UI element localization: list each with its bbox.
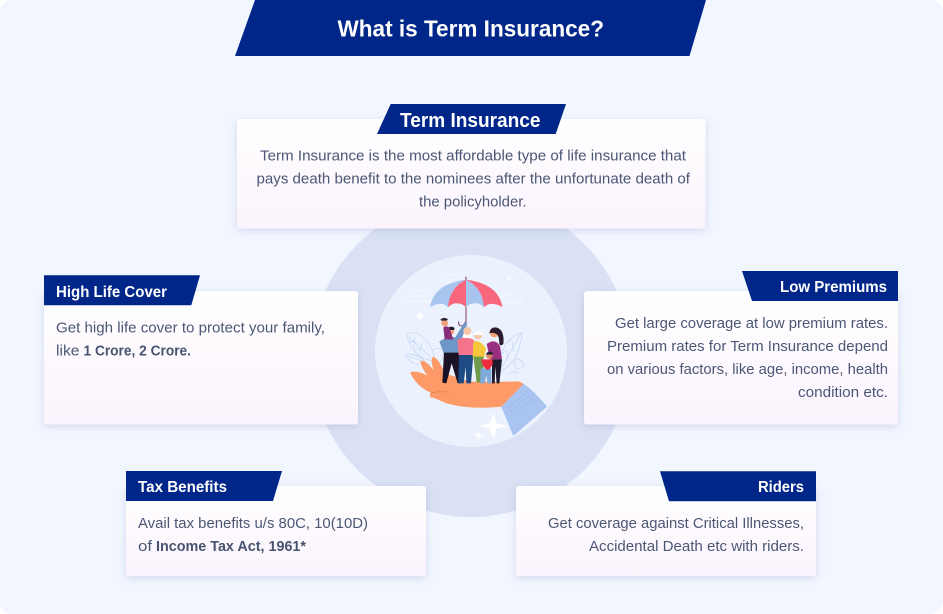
heading tag: [742, 271, 898, 301]
heading tag: Riders: [758, 479, 804, 496]
heading tag: Tax Benefits: [138, 479, 227, 496]
body text: Get large coverage at low premium rates.: [615, 316, 888, 332]
illustration: hand holding family under umbrella: [404, 274, 547, 441]
body text: condition etc.: [798, 385, 888, 401]
leaves: [405, 332, 524, 373]
body text: Accidental Death etc with riders.: [589, 539, 804, 555]
umbrella: [430, 277, 502, 326]
heading tag: High Life Cover: [56, 284, 167, 301]
outer circle: [311, 197, 631, 517]
heading tag: Low Premiums: [780, 279, 887, 296]
panel: tax benefits: [126, 471, 426, 576]
sleeve: [501, 383, 547, 436]
body text: [607, 316, 888, 401]
heading tag: [660, 471, 816, 501]
body text: Premium rates for Term Insurance depend: [607, 339, 888, 355]
card background: [516, 486, 816, 576]
heading tag: [377, 104, 566, 134]
title banner: [235, 0, 706, 56]
body text: [138, 516, 368, 555]
body text: [256, 148, 691, 210]
body text: Avail tax benefits u/s 80C, 10(10D): [138, 516, 368, 532]
title text: What is Term Insurance?: [338, 16, 604, 42]
panel: riders: [516, 471, 816, 576]
body text: the policyholder.: [419, 194, 526, 210]
panel: high life cover: [44, 275, 358, 424]
body text: [548, 516, 804, 555]
body text: like: [56, 344, 80, 360]
clouds and sparkles: [404, 274, 523, 441]
inner circle: [375, 255, 567, 447]
card background: [44, 291, 358, 424]
heading tag: [44, 275, 200, 305]
body text: of: [138, 539, 153, 555]
card background: [237, 119, 706, 228]
hand: [410, 357, 523, 408]
body text: Get coverage against Critical Illnesses,: [548, 516, 804, 532]
body text: Income Tax Act, 1961*: [156, 539, 306, 555]
family: [439, 318, 504, 383]
panel: term insurance: [237, 104, 706, 228]
body text: pays death benefit to the nominees after the unfortunate death of: [256, 172, 691, 188]
body text: Get high life cover to protect your family,: [56, 320, 325, 336]
card background: [584, 291, 898, 424]
body text: 1 Crore, 2 Crore.: [84, 344, 191, 360]
card background: [126, 486, 426, 576]
hand crease: [431, 392, 449, 393]
panel: low premiums: [584, 271, 898, 424]
body text: [56, 320, 325, 360]
body text: Term Insurance is the most affordable type of life insurance that: [260, 148, 686, 164]
heading tag: [126, 471, 282, 501]
heading tag: Term Insurance: [400, 110, 540, 132]
body text: on various factors, like age, income, health: [607, 362, 888, 378]
